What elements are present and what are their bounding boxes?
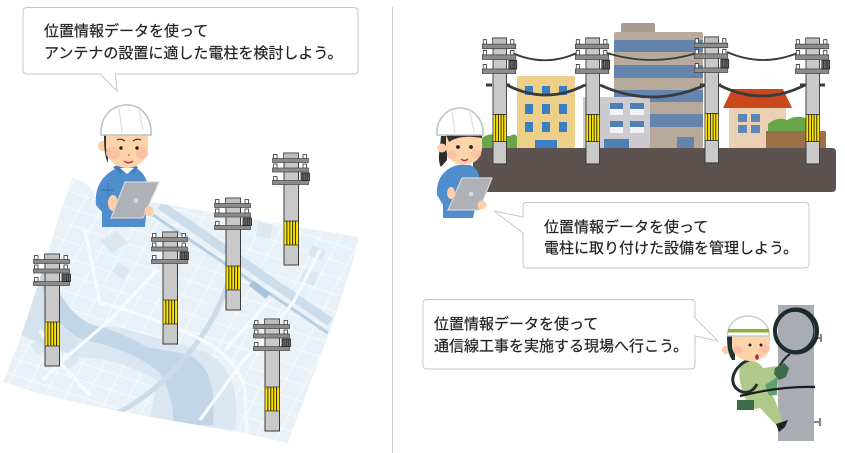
- bushes and fence: [482, 117, 826, 148]
- building: yellow apartment: [517, 76, 575, 148]
- callout text: 位置情報データを使って: [44, 23, 208, 40]
- utility pole C: [694, 37, 729, 163]
- icon: female worker with tablet: [437, 108, 492, 218]
- concrete pole: [778, 305, 814, 441]
- torso and arm: [739, 361, 783, 402]
- helmet: [727, 316, 769, 336]
- head: [722, 346, 730, 354]
- overhead cables: [486, 52, 825, 97]
- utility pole 1: [34, 254, 70, 366]
- callout text: 位置情報データを使って: [434, 316, 598, 333]
- belt: [740, 387, 815, 396]
- building: house: [723, 89, 792, 148]
- utility pole B: [575, 38, 610, 164]
- ground: [473, 148, 836, 192]
- panel: map with utility poles: [0, 153, 365, 450]
- glove: [774, 363, 789, 380]
- utility pole 2: [152, 232, 188, 344]
- utility pole A: [482, 38, 517, 164]
- icon: worker climbing pole: [722, 305, 822, 441]
- tool pouch: [737, 400, 754, 410]
- callout text: 位置情報データを使って: [544, 219, 708, 236]
- callout: construction work: [423, 300, 718, 369]
- utility pole 4: [272, 153, 310, 265]
- callout: equipment management: [494, 202, 809, 268]
- panel: street scene: [473, 23, 836, 192]
- icon: worker with tablet: [96, 105, 159, 227]
- harness: [733, 360, 757, 392]
- callout: pole planning: [23, 8, 358, 91]
- callout text: 通信線工事を実施する現場へ行こう。: [434, 338, 688, 355]
- legs: [747, 392, 783, 425]
- divider: [392, 7, 394, 453]
- utility pole D: [795, 38, 830, 164]
- pole steps: [814, 334, 822, 426]
- building: tall office: [614, 23, 703, 148]
- utility pole 5: [254, 319, 290, 431]
- callout text: 電柱に取り付けた設備を管理しよう。: [544, 239, 798, 257]
- city map: [0, 170, 365, 450]
- callout text: アンテナの設置に適した電柱を検討しよう。: [44, 45, 343, 62]
- cable coil: [775, 310, 817, 367]
- building: grey apartment: [583, 97, 650, 148]
- utility pole 3: [214, 198, 252, 310]
